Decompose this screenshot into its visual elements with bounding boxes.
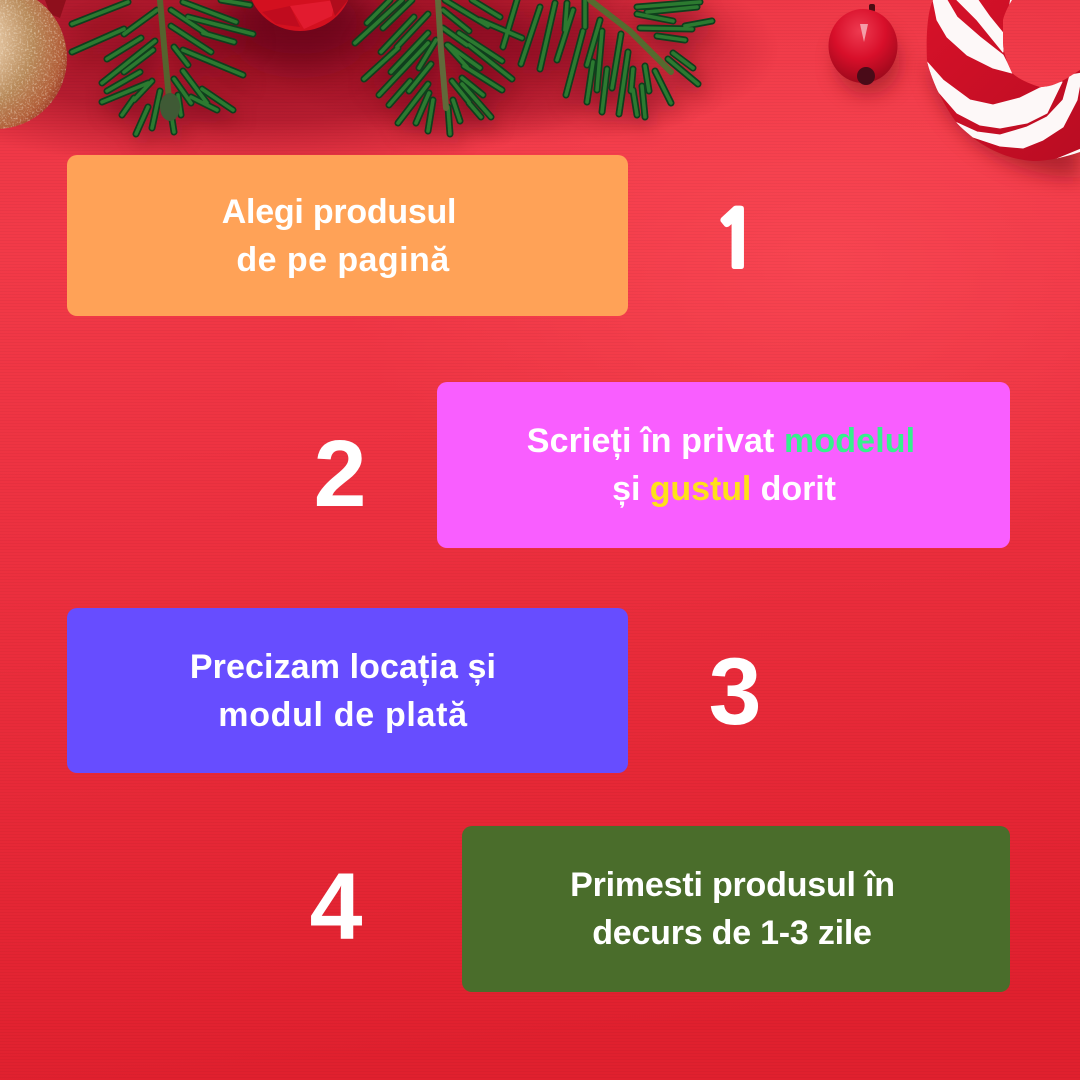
- right-side light: [340, 0, 1080, 560]
- icon: red berry: [828, 4, 898, 85]
- step 1 box: [67, 155, 628, 316]
- step number 4: 4: [310, 854, 362, 960]
- step number 3: 3: [709, 639, 761, 745]
- top-left shadow area: [0, 0, 670, 170]
- step 3 box: Precizam locația și: [190, 648, 496, 686]
- icon: pine sprig right: [540, 0, 712, 117]
- step 1 box: Alegi produsul: [222, 192, 456, 230]
- step 3 box: modul de plată: [218, 696, 468, 734]
- icon: candy cane: [926, 0, 1080, 161]
- step 3 box: [67, 608, 628, 773]
- icon: red glass ornament: [247, 0, 353, 31]
- ornament shadows: [76, 0, 1080, 178]
- step number 2: 2: [314, 421, 366, 527]
- icon: pine sprig centre: [355, 0, 540, 134]
- centre shadow area: [260, 0, 780, 145]
- step 1 box: de pe pagină: [236, 240, 450, 278]
- step 4 box: Primesti produsul în: [570, 866, 895, 904]
- step 2 box: Scrieți în privat modelul: [527, 422, 915, 460]
- step 2 box: și gustul dorit: [612, 470, 836, 508]
- step number 1: 1: [712, 201, 760, 279]
- icon: gold glitter bauble: [0, 0, 67, 129]
- step 2 box: [437, 382, 1010, 548]
- icon: pine sprig left: [72, 0, 253, 134]
- step 4 box: [462, 826, 1010, 992]
- step 4 box: decurs de 1-3 zile: [592, 914, 872, 952]
